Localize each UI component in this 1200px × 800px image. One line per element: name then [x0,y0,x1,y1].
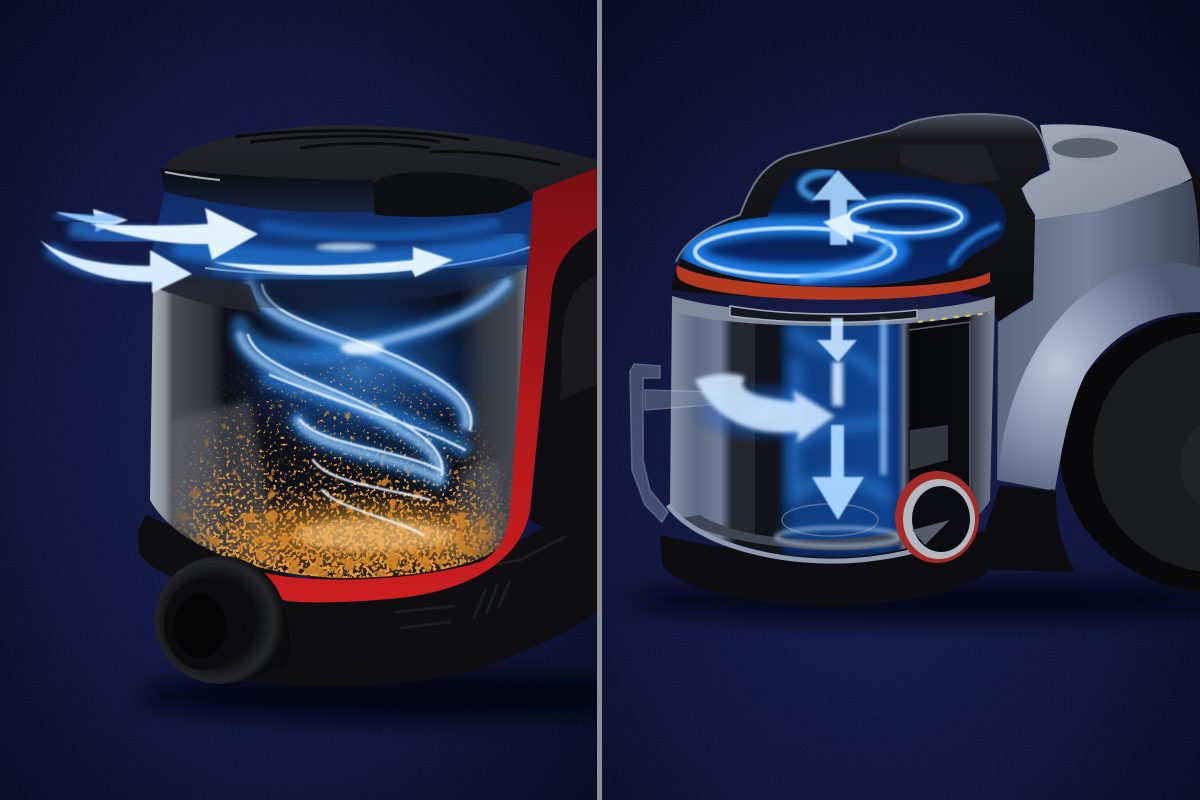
arrow: central down [817,318,857,362]
divider line [597,0,602,800]
spiral body [240,282,507,480]
red ring outlet [895,471,979,563]
blue chamber window [680,168,1006,287]
window swirls [691,172,1000,280]
red trim strip [265,168,597,602]
panel: left vacuum, red canister with dust cyclone [40,125,660,721]
lid edge highlight [165,172,220,180]
silver top housing [1020,124,1192,220]
rear wheel [1060,312,1200,592]
base vents and trim [285,536,568,630]
hood silver edge [676,114,1050,262]
rear ring [782,504,878,536]
spiral sparkle [340,341,384,355]
dust bin cylinder [150,265,527,578]
central blue air column [785,318,897,550]
arrow: side airflow [687,374,843,446]
arrow: lower inlet [40,240,192,293]
control panel [1052,133,1118,158]
upper chrome rim [672,296,995,326]
bin contents [680,318,948,550]
chamber frame [909,322,970,500]
collar lower dark shadow [160,275,260,312]
rear black section [1180,150,1200,258]
lid latch cap [373,172,532,217]
panel: right background [602,0,1200,800]
bin contents [170,275,515,580]
yellow dashed seal [918,313,990,322]
column lights [790,330,890,500]
floor plate [680,515,905,550]
bottom swirl [776,528,900,546]
dark pillar [733,320,755,540]
thin side air streak [880,320,887,475]
collar glass rim [205,247,530,274]
chamber parts [910,425,948,470]
rim slot [730,306,917,322]
cyclone spiral [240,282,507,535]
dust speckle layers [170,330,515,580]
black base [138,500,597,686]
silver fender [998,262,1200,490]
clear dust bin [670,296,995,557]
side panel inner detail [560,275,597,400]
arrow: top swirl return [823,213,870,243]
bin handle [630,364,720,522]
glass collar [150,188,536,309]
floor shadow [140,669,660,721]
silver main body [997,180,1200,490]
black side panel [530,230,597,560]
hose nozzle [155,556,281,684]
red gasket [676,265,990,300]
lid ribbed vents [235,131,560,165]
stem: central streak [832,362,843,406]
floor shadow [630,580,1200,620]
bin bottom rim [668,505,950,561]
lid front band [160,168,373,213]
panel: right vacuum, silver canister with clean airflow [630,114,1200,620]
arrow: vertical up [812,170,867,245]
arrow: top inlet [55,209,128,232]
arrow: middle inlet [70,208,258,260]
blue glow of cyclone [234,287,482,454]
glass reflection at bottom [172,400,280,570]
black lower base [660,485,1075,606]
handle mechanism [900,145,1000,185]
panel: left background [0,0,597,800]
spiral halo [240,282,507,480]
arrow: bottom downward [812,425,864,520]
dust pile glow [235,505,495,565]
spiral highlights [248,285,471,535]
arrow: inner swirl [213,247,453,277]
collar airflow glow [175,222,525,261]
black hood with handle [672,114,1045,322]
black lid top [160,125,597,206]
